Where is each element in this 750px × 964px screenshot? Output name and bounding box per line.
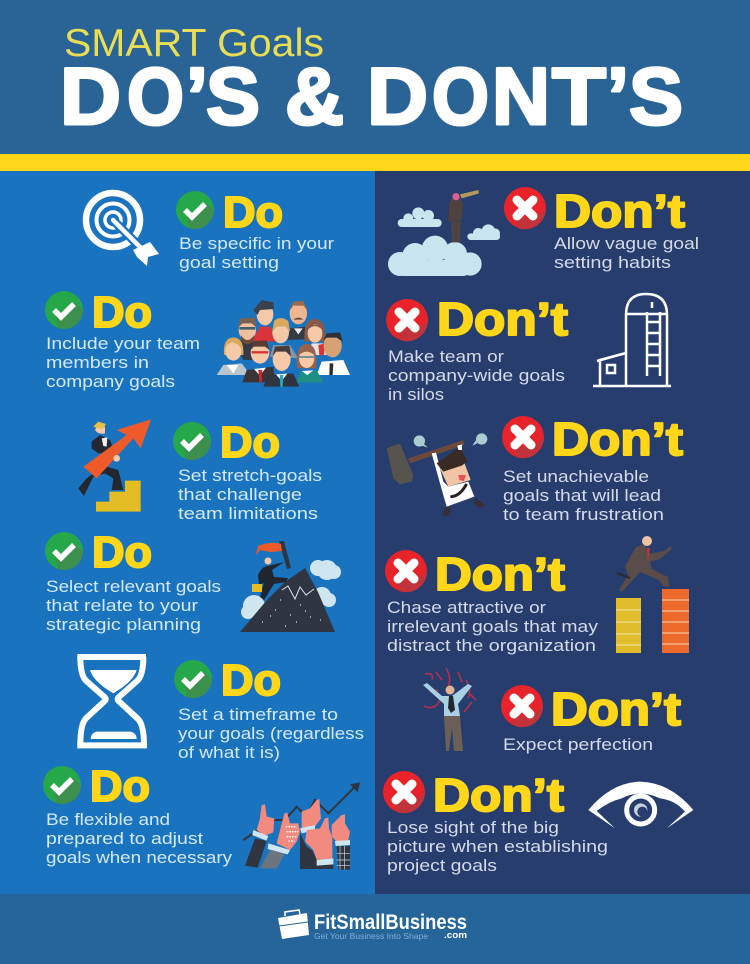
text: stretch goals: Set stretch-goals — [178, 466, 322, 485]
icon: team of people — [217, 300, 350, 387]
text: unachievable — [503, 467, 664, 524]
footer band — [0, 894, 750, 964]
panel: dont 3 — [387, 413, 683, 524]
icon: red cross — [386, 299, 428, 341]
text: include your team: members in — [46, 353, 149, 372]
icon: briefcase — [278, 910, 309, 939]
text: chase: Chase attractive or — [387, 598, 546, 617]
text: be flexible: Be flexible and — [46, 810, 170, 829]
title: DO'S & DONT'S: S — [629, 52, 683, 142]
title: DO'S & DONT'S: O — [127, 52, 184, 142]
heading: Don't: Don’t — [552, 413, 683, 465]
text: be specific — [179, 234, 334, 272]
panel: dont 2 — [386, 293, 671, 404]
text: timeframe: Set a timeframe to — [178, 705, 338, 724]
text: include your team: company goals — [46, 372, 175, 391]
icon: red cross — [501, 685, 543, 727]
icon: hourglass — [77, 657, 147, 745]
heading: Do: Do — [90, 762, 150, 811]
title: DO'S & DONT'S: D — [60, 52, 121, 142]
text: big picture: project goals — [387, 856, 497, 875]
text: relevant goals: that relate to your — [46, 596, 198, 615]
text: silos: Make team or — [388, 347, 504, 366]
heading: Don't: Don’t — [554, 185, 685, 237]
icon: green check — [174, 660, 212, 698]
text: chase: irrelevant goals that may — [387, 617, 599, 636]
right panel background — [375, 171, 750, 894]
heading: Do: Do — [220, 418, 280, 467]
icon: green check — [45, 532, 83, 570]
title: SMART Goals: SMART Goals — [64, 22, 324, 65]
title: DO'S & DONT'S: & — [285, 52, 344, 142]
text: chase — [387, 598, 599, 655]
icon: thumbs up hands with rising arrow — [243, 782, 360, 870]
title: DO'S & DONT'S: T — [552, 52, 606, 142]
text: timeframe: your goals (regardless — [178, 724, 364, 743]
text: include your team — [46, 334, 200, 391]
text: silos — [388, 347, 565, 404]
text: stretch goals: that challenge — [178, 485, 302, 504]
icon: man jumping between bars — [616, 536, 689, 653]
text: chase: distract the organization — [387, 636, 596, 655]
.com suffix: .com — [444, 930, 467, 940]
icon: target with arrow — [86, 193, 159, 266]
heading: Don't: Don’t — [437, 293, 568, 345]
text: unachievable: Set unachievable — [503, 467, 649, 486]
title: DO'S & DONT'S: ’ — [607, 52, 629, 142]
text: be flexible: prepared to adjust — [46, 829, 203, 848]
panel: do 5 — [77, 656, 364, 762]
icon: man carrying arrow up stairs — [78, 419, 151, 512]
text: big picture: Lose sight of the big — [387, 818, 559, 837]
text: relevant goals: Select relevant goals — [46, 577, 221, 596]
icon: red cross — [502, 416, 544, 458]
panel: do 2 — [45, 288, 350, 391]
icon: red cross — [504, 187, 546, 229]
title: DO'S & DONT'S: N — [492, 52, 550, 142]
text: silos: company-wide goals — [388, 366, 565, 385]
text: unachievable: goals that will lead — [503, 486, 661, 505]
text: relevant goals: strategic planning — [46, 615, 201, 634]
panel: dont 1 — [388, 185, 699, 276]
icon: green check — [176, 191, 214, 229]
text: big picture: picture when establishing — [387, 837, 608, 856]
panel: dont 5 — [423, 668, 681, 754]
icon: green check — [43, 766, 81, 804]
text: vague habits: setting habits — [554, 253, 671, 272]
text: silos: in silos — [388, 385, 444, 404]
text: stretch goals: team limitations — [178, 504, 318, 523]
text: be specific: goal setting — [179, 253, 279, 272]
text: be flexible — [46, 810, 233, 867]
panel: dont 4 — [385, 536, 689, 655]
text: unachievable: to team frustration — [503, 505, 664, 524]
text: vague habits — [554, 234, 699, 272]
heading: Don't: Don’t — [433, 769, 564, 821]
text: include your team: Include your team — [46, 334, 200, 353]
icon: red cross — [385, 550, 427, 592]
heading: Don't: Don’t — [551, 683, 681, 735]
icon: frustrated man with hammer — [387, 433, 487, 516]
panel: do 4 — [45, 528, 341, 634]
panel: do 1 — [86, 188, 334, 272]
title: DO'S & DONT'S: O — [432, 52, 489, 142]
footer logo — [278, 910, 467, 941]
text: timeframe: of what it is) — [178, 743, 280, 762]
icon: red cross — [383, 771, 425, 813]
text: be specific: Be specific in your — [179, 234, 334, 253]
heading: Don't: Don’t — [435, 548, 565, 600]
text: be flexible: goals when necessary — [46, 848, 233, 867]
heading: Do: Do — [223, 188, 283, 237]
title: DO'S & DONT'S: S — [206, 52, 260, 142]
icon: silo building — [593, 294, 671, 386]
icon: man with telescope on clouds — [388, 190, 500, 276]
text: vague habits: Allow vague goal — [554, 234, 699, 253]
panel: dont 6 — [383, 769, 693, 875]
brand name: FitSmallBusiness — [314, 911, 467, 934]
yellow divider bar — [0, 154, 750, 171]
icon: climber on mountain — [240, 541, 341, 632]
icon: green check — [45, 291, 83, 329]
panel: do 3 — [78, 418, 322, 523]
icon: green check — [173, 422, 211, 460]
heading: Do: Do — [92, 528, 152, 577]
text: timeframe — [178, 705, 364, 762]
title: DO'S & DONT'S: ’ — [186, 52, 208, 142]
panel: do 6 — [43, 762, 360, 870]
header band — [0, 0, 750, 154]
icon: eye — [588, 782, 693, 828]
title: DO'S & DONT'S: D — [367, 52, 428, 142]
icon: stressed man with confetti — [423, 668, 476, 751]
left panel background — [0, 171, 375, 894]
text: perfection: Expect perfection — [503, 735, 653, 754]
text: big picture — [387, 818, 608, 875]
tagline: Get Your Business Into Shape — [314, 932, 429, 941]
text: stretch goals — [178, 466, 322, 523]
heading: Do: Do — [92, 288, 152, 337]
heading: Do: Do — [221, 656, 281, 705]
text: relevant goals — [46, 577, 221, 634]
